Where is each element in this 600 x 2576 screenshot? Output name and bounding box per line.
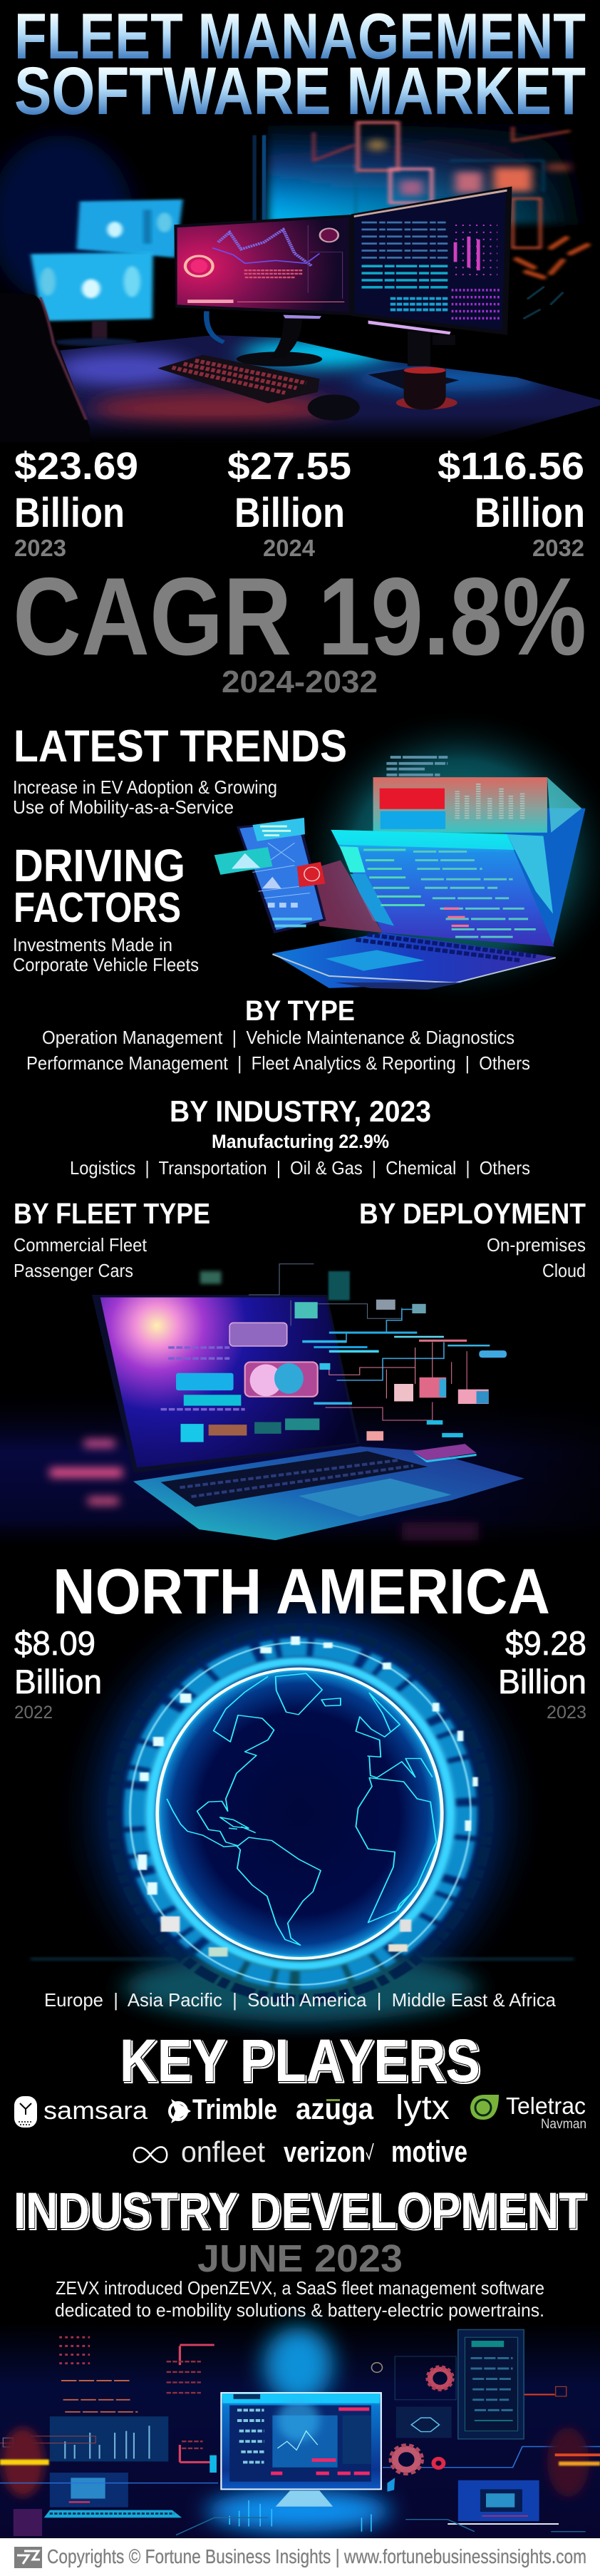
floating red panel	[373, 777, 581, 833]
heading: BY TYPE	[245, 995, 355, 1027]
market size: 2024	[227, 445, 351, 561]
globe disc	[157, 1669, 442, 1959]
outer glow	[101, 1613, 500, 2009]
market size: 2023: 2023	[14, 535, 66, 561]
logo: azuga: azuga	[296, 2092, 374, 2125]
laptop base lower edge	[335, 982, 463, 990]
heading: LATEST TRENDS	[14, 722, 347, 771]
right monitor with code	[351, 186, 512, 335]
code lines above panel	[386, 757, 448, 781]
background	[0, 2321, 600, 2537]
cubes	[366, 1377, 489, 1462]
deployment items: Cloud	[542, 1260, 586, 1281]
illustration: laptop with circuit network	[0, 1264, 600, 1554]
heading: BY FLEET TYPE	[14, 1197, 210, 1230]
left chart panel	[0, 2416, 168, 2461]
type items: Operation Management | Vehicle Maintenance & Diagnostics	[42, 1027, 514, 1048]
illustration: laptop and phone	[214, 708, 600, 1005]
phone	[214, 818, 326, 933]
coffee cup	[396, 367, 457, 410]
market size: 2024: $27.55	[227, 445, 351, 488]
market size: 2023: Billion	[14, 490, 125, 536]
driver text	[13, 934, 199, 975]
monitor stand	[276, 2490, 333, 2507]
base lights	[0, 2446, 600, 2532]
left code panel	[59, 2337, 214, 2462]
market size: 2023: $23.69	[14, 445, 138, 488]
fleet items	[14, 1234, 148, 1281]
north and south america	[167, 1676, 321, 1945]
fleet items: Passenger Cars	[14, 1260, 133, 1281]
other regions: Europe | Asia Pacific | South America | Middle East & Africa	[44, 1989, 557, 2011]
trend text: Use of Mobility-as-a-Service	[13, 796, 234, 818]
keyboard	[157, 355, 319, 404]
industry items: Logistics | Transportation | Oil & Gas | Chemical | Others	[70, 1157, 530, 1179]
iceland	[321, 1698, 341, 1706]
hex panel	[395, 2356, 456, 2438]
bright light ring	[150, 1661, 450, 1966]
right flare	[524, 2386, 600, 2497]
right small laptop	[448, 2480, 559, 2524]
laptop screen	[331, 830, 554, 947]
development text: dedicated to e-mobility solutions & battery-electric powertrains.	[55, 2299, 544, 2321]
logo: motive: motive	[391, 2135, 467, 2168]
title	[14, 1, 586, 129]
north america 2023 value: Billion	[498, 1663, 586, 1700]
logo: verizon: verizon	[284, 2137, 366, 2168]
footer logo	[14, 2547, 42, 2568]
laptop lid	[92, 1295, 360, 1473]
left small laptop	[14, 2473, 182, 2536]
africa	[356, 1777, 436, 1922]
blurred pink lights on the floor	[50, 1440, 478, 1540]
mouse	[308, 394, 360, 421]
market size: 2023	[14, 445, 138, 561]
gears	[371, 2363, 452, 2473]
market size: 2032	[438, 445, 585, 561]
hero illustration: desk with monitors	[0, 123, 600, 441]
segmented light ring	[135, 1647, 466, 1980]
leading segment: Manufacturing 22.9%	[212, 1131, 389, 1152]
market size: 2024: Billion	[234, 490, 345, 536]
north america 2023 value: 2023	[547, 1703, 586, 1723]
madagascar	[396, 1893, 411, 1912]
type items: Performance Management | Fleet Analytics & Reporting | Others	[26, 1052, 530, 1074]
pink projection	[306, 860, 383, 933]
logo: Trimble: Trimble	[192, 2094, 277, 2125]
logo: Trimble	[170, 2094, 277, 2125]
rear laptop lid	[497, 808, 586, 946]
fleet items: Commercial Fleet	[14, 1234, 148, 1256]
north america 2022 value: 2022	[14, 1703, 53, 1723]
central monitor	[210, 2393, 395, 2492]
floating platforms	[200, 1271, 507, 1405]
illustration: glowing globe	[31, 1613, 574, 2021]
latest trends	[13, 722, 347, 818]
key players logos	[14, 2089, 586, 2168]
heading	[14, 840, 185, 931]
market size: 2024: 2024	[263, 535, 316, 561]
deployment items	[487, 1234, 586, 1281]
heading: BY INDUSTRY, 2023	[170, 1094, 431, 1128]
illustration: software dashboards	[0, 2321, 600, 2537]
plant	[517, 238, 587, 318]
development text: ZEVX introduced OpenZEVX, a SaaS fleet management software	[56, 2277, 544, 2299]
thin outer line	[130, 1643, 471, 1985]
floor line	[31, 1958, 574, 1961]
europe	[356, 1693, 433, 1777]
by fleet type	[14, 1197, 210, 1281]
laptop base	[133, 1447, 524, 1540]
floor glow	[0, 1384, 600, 1554]
right document panel	[458, 2330, 524, 2439]
driver text: Corporate Vehicle Fleets	[13, 954, 199, 975]
driver text: Investments Made in	[13, 934, 172, 955]
development text	[55, 2277, 544, 2321]
heading: FACTORS	[14, 884, 181, 931]
logo: Teletrac Navman: Navman	[541, 2117, 586, 2132]
north america 2023 value: $9.28	[505, 1624, 586, 1662]
white rim	[157, 1669, 442, 1959]
logo: Teletrac Navman	[470, 2093, 586, 2132]
circuit network	[249, 1264, 467, 1420]
left monitor with chart	[174, 215, 352, 319]
central glow	[264, 2327, 333, 2403]
development date: JUNE 2023	[197, 2237, 403, 2280]
driving factors	[13, 840, 199, 975]
market size: 2032: $116.56	[438, 445, 584, 488]
logo: onfleet	[134, 2135, 266, 2168]
north america 2022 value: $8.09	[14, 1624, 95, 1662]
trend text	[13, 776, 277, 818]
trend text: Increase in EV Adoption & Growing	[13, 776, 277, 798]
footer	[0, 2538, 600, 2576]
key players heading: KEY PLAYERS	[120, 2027, 480, 2094]
market size: 2032: 2032	[532, 535, 584, 561]
footer background	[0, 2538, 600, 2576]
logo: onfleet: onfleet	[181, 2135, 266, 2168]
north america 2022 value	[14, 1624, 102, 1723]
dark outer ring	[113, 1628, 488, 1999]
chair edge	[0, 293, 90, 441]
monitor stands	[207, 311, 459, 393]
logo: samsara	[14, 2096, 148, 2128]
desk surface	[38, 332, 600, 441]
continents outline	[167, 1673, 436, 1945]
heading: DRIVING	[14, 840, 185, 891]
greenland	[276, 1673, 322, 1715]
caribbean islands	[220, 1817, 256, 1833]
by type	[26, 995, 530, 1074]
floor fade on right	[0, 1384, 600, 1554]
teal glow	[294, 708, 600, 1005]
left flare	[0, 2428, 49, 2497]
deployment items: On-premises	[487, 1234, 586, 1256]
CAGR period: 2024-2032	[222, 664, 378, 699]
by industry	[70, 1094, 530, 1179]
market size: 2032: Billion	[475, 490, 585, 536]
by deployment	[359, 1197, 586, 1281]
north america 2023 value	[498, 1624, 586, 1723]
background window	[252, 123, 581, 248]
logo: lytx: lytx	[395, 2089, 450, 2127]
type items	[26, 1027, 530, 1074]
north america 2022 value: Billion	[14, 1663, 102, 1700]
ring highlights	[138, 1636, 478, 1956]
logo: samsara: samsara	[43, 2097, 148, 2125]
blurred rear monitors	[31, 200, 183, 346]
laptop base with keyboard	[272, 933, 556, 988]
logo: Teletrac Navman: Teletrac	[506, 2093, 586, 2119]
floor lines	[176, 2518, 586, 2535]
north america heading: NORTH AMERICA	[53, 1556, 550, 1628]
floor glow	[125, 1954, 477, 2021]
dim shape behind left monitors	[0, 135, 134, 304]
